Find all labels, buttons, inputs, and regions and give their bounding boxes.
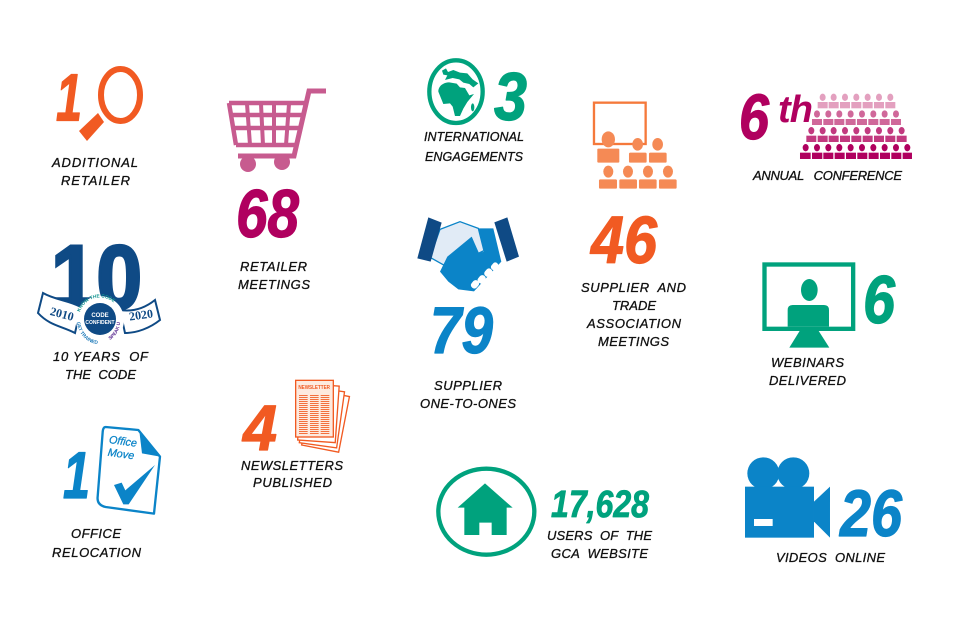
number: 68: 68 xyxy=(236,176,299,252)
icon: video camera xyxy=(745,457,830,538)
panel: supplier one-to-ones xyxy=(417,217,519,411)
label: TRADE xyxy=(612,298,656,313)
label: MEETINGS xyxy=(598,334,669,349)
number: 26: 26 xyxy=(838,476,903,550)
label: THE CODE xyxy=(65,367,136,382)
panel: videos online xyxy=(745,457,903,565)
panel: supplier and trade association meetings xyxy=(581,103,686,349)
panel: website users xyxy=(438,469,652,561)
label: ENGAGEMENTS xyxy=(425,150,524,164)
label xyxy=(581,280,686,349)
number: 4: 4 xyxy=(241,392,277,464)
icon: office move document xyxy=(98,427,160,514)
number: 3: 3 xyxy=(494,59,527,135)
panel: office relocation xyxy=(52,427,160,560)
icon: conference audience xyxy=(800,94,912,159)
panel: webinars delivered xyxy=(764,262,896,388)
label: MEETINGS xyxy=(238,277,310,292)
icon: office move document: Office xyxy=(108,434,138,450)
label xyxy=(52,526,142,560)
panel: international engagements xyxy=(424,59,527,164)
number: 6th: th xyxy=(778,89,813,131)
label: RELOCATION xyxy=(52,545,142,560)
label: ADDITIONAL xyxy=(51,155,138,170)
label xyxy=(51,155,138,188)
label: ASSOCIATION xyxy=(586,316,682,331)
label: RETAILER xyxy=(240,259,307,274)
badge: code confident 2010-2020: 2010 xyxy=(49,304,75,324)
label: 10 YEARS OF xyxy=(53,349,149,364)
label: ONE-TO-ONES xyxy=(420,396,516,411)
badge: code confident 2010-2020: CONFIDENT xyxy=(85,320,115,326)
icon: newsletter stack: NEWSLETTER xyxy=(298,385,330,391)
panel: additional retailer xyxy=(51,60,140,188)
number: 6th xyxy=(739,81,813,153)
panel: ten years of the code xyxy=(36,228,162,382)
icon: presentation audience xyxy=(594,103,677,189)
icon: webinar screen xyxy=(764,264,853,348)
icon: globe xyxy=(429,60,483,123)
label: PUBLISHED xyxy=(253,475,332,490)
label xyxy=(53,349,149,382)
number: 79: 79 xyxy=(430,293,493,367)
label: INTERNATIONAL xyxy=(424,130,524,144)
label xyxy=(420,378,516,411)
panel: annual conference xyxy=(739,81,912,183)
number: 46: 46 xyxy=(589,203,658,278)
label: RETAILER xyxy=(61,173,130,188)
badge: code confident 2010-2020: 2020 xyxy=(128,306,154,324)
number: 6: 6 xyxy=(863,262,896,338)
badge: code confident 2010-2020: GET TRAINED xyxy=(77,322,98,344)
icon: handshake xyxy=(417,217,519,291)
badge: code confident 2010-2020: KNOW THE CODE xyxy=(77,294,116,312)
label xyxy=(241,458,343,490)
label: USERS OF THE xyxy=(547,528,652,543)
label: OFFICE xyxy=(71,526,121,541)
label: NEWSLETTERS xyxy=(241,458,343,473)
panel: retailer meetings xyxy=(229,91,326,292)
number: 1: 1 xyxy=(56,60,82,136)
label xyxy=(424,130,524,164)
label: VIDEOS ONLINE xyxy=(776,550,885,565)
number: 17,628: 17,628 xyxy=(551,484,650,526)
panel: newsletters published xyxy=(241,380,349,490)
icon: office move document: Move xyxy=(107,447,135,462)
badge: code confident 2010-2020: SPEAK UP xyxy=(108,322,120,340)
label xyxy=(769,355,846,388)
label xyxy=(238,259,310,292)
label: SUPPLIER xyxy=(434,378,502,393)
number: 6th: 6 xyxy=(739,81,769,153)
label xyxy=(547,528,652,561)
icon: shopping cart xyxy=(229,91,326,172)
label: ANNUAL CONFERENCE xyxy=(752,168,902,183)
label: SUPPLIER AND xyxy=(581,280,686,295)
number: 1: 1 xyxy=(63,438,90,512)
label: GCA WEBSITE xyxy=(551,546,648,561)
label: WEBINARS xyxy=(771,355,844,370)
icon: house in ring xyxy=(438,469,534,555)
number: 10: 10 xyxy=(51,228,142,328)
badge: code confident 2010-2020 xyxy=(36,292,162,344)
icon: magnifying glass zero xyxy=(79,69,140,141)
badge: code confident 2010-2020: CODE xyxy=(91,313,109,319)
label: DELIVERED xyxy=(769,373,846,388)
